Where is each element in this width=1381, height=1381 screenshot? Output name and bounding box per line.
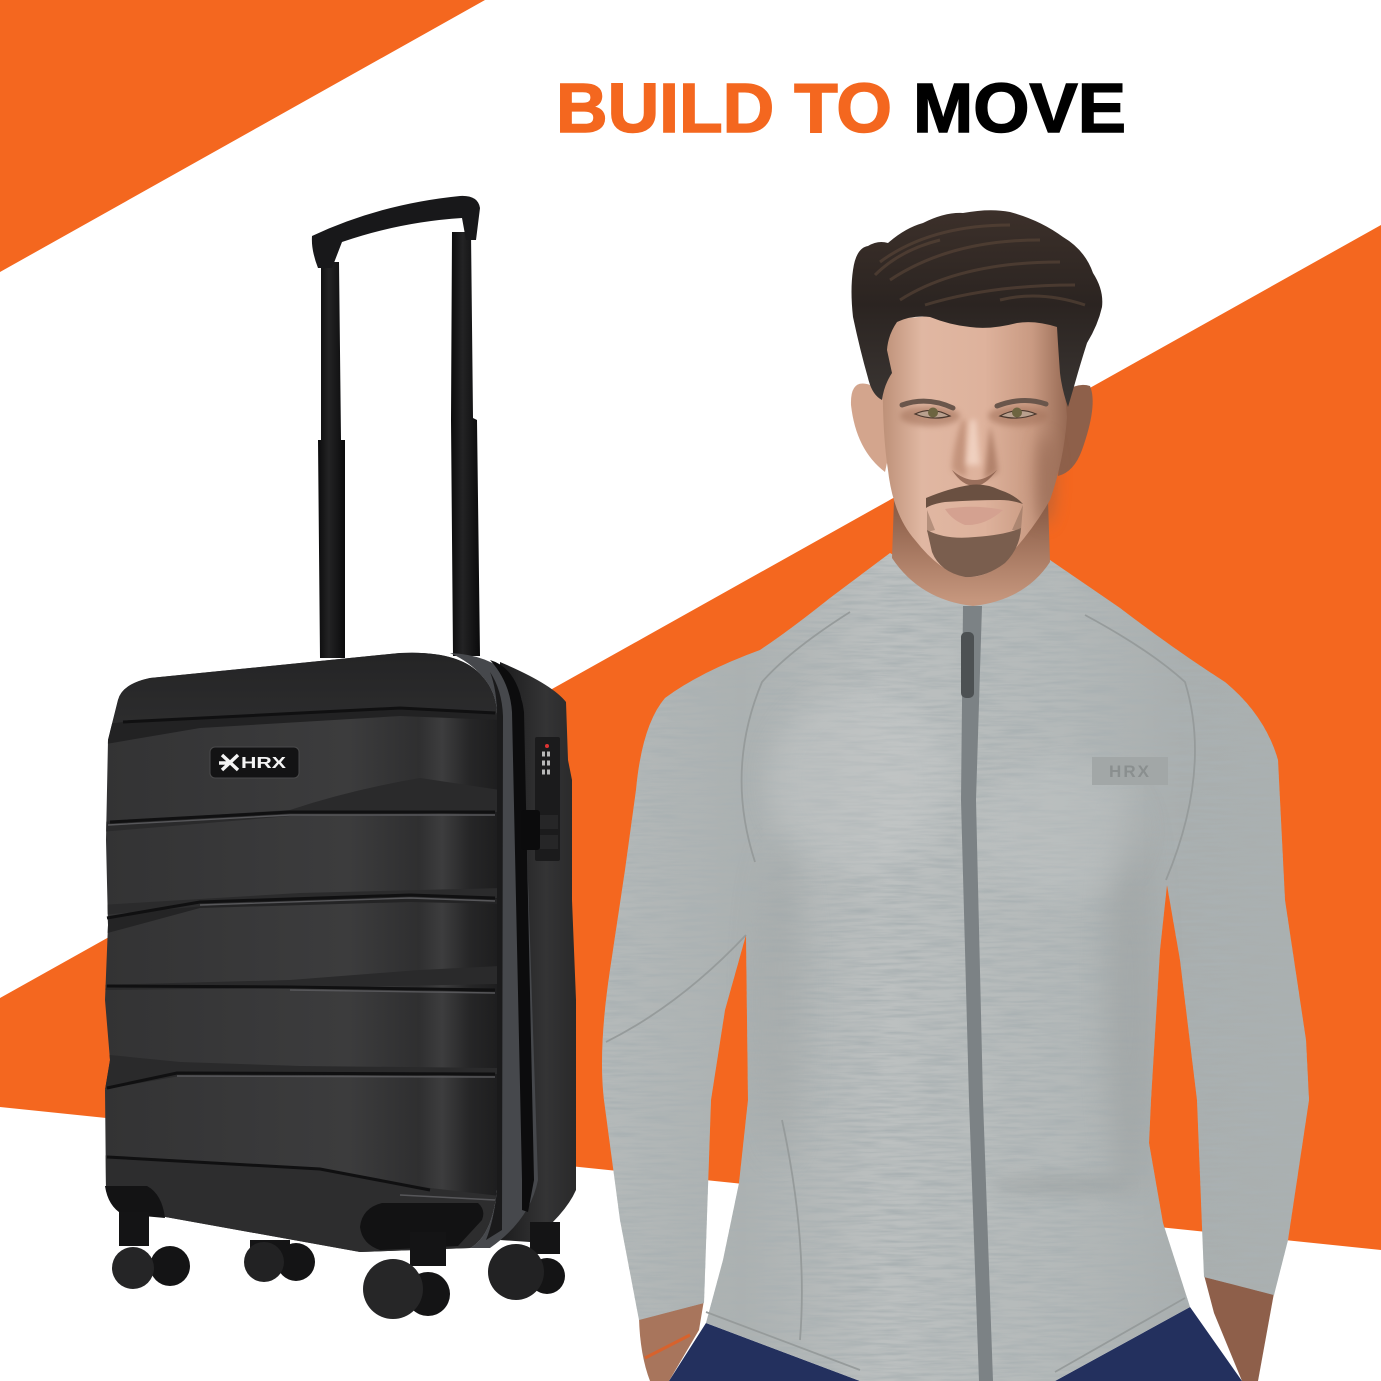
person <box>590 210 1320 1381</box>
combination lock <box>521 737 560 861</box>
title: BUILD TO <box>556 69 892 147</box>
brand badge: HRX <box>241 755 286 772</box>
facial hair <box>926 485 1023 577</box>
zip pull <box>961 632 974 698</box>
chest logo: HRX <box>1109 762 1151 781</box>
shell top cap and bevels <box>100 640 510 1260</box>
right side panel <box>500 662 576 1242</box>
wheels <box>112 1212 565 1319</box>
background shape: top-left orange triangle <box>0 0 485 272</box>
hair strands <box>875 225 1085 305</box>
wheel housings <box>105 1186 165 1218</box>
face shading <box>900 406 1055 525</box>
ears <box>851 384 1093 476</box>
zipper <box>961 606 993 1381</box>
zipper gasket and zipper <box>450 653 538 1248</box>
eyes <box>915 408 1036 418</box>
title: MOVE <box>913 69 1126 147</box>
title <box>556 69 1126 147</box>
jacket fabric texture and folds <box>590 540 1320 1381</box>
face <box>883 305 1067 577</box>
chest logo <box>1092 757 1168 785</box>
jacket silhouette <box>602 553 1309 1381</box>
lips <box>945 507 1003 525</box>
neck <box>892 500 1050 606</box>
suitcase <box>100 196 576 1319</box>
jacket seams <box>606 612 1195 1372</box>
brand badge <box>210 747 299 778</box>
rib grooves <box>107 708 495 1190</box>
telescopic handle <box>312 196 480 658</box>
rib highlights <box>108 815 495 1200</box>
eyebrows <box>902 400 1046 408</box>
suitcase shell <box>105 653 497 1252</box>
hands <box>639 1275 1274 1381</box>
background shape: orange diagonal band <box>0 225 1381 1250</box>
trousers <box>669 1307 1242 1381</box>
hair <box>852 210 1102 407</box>
